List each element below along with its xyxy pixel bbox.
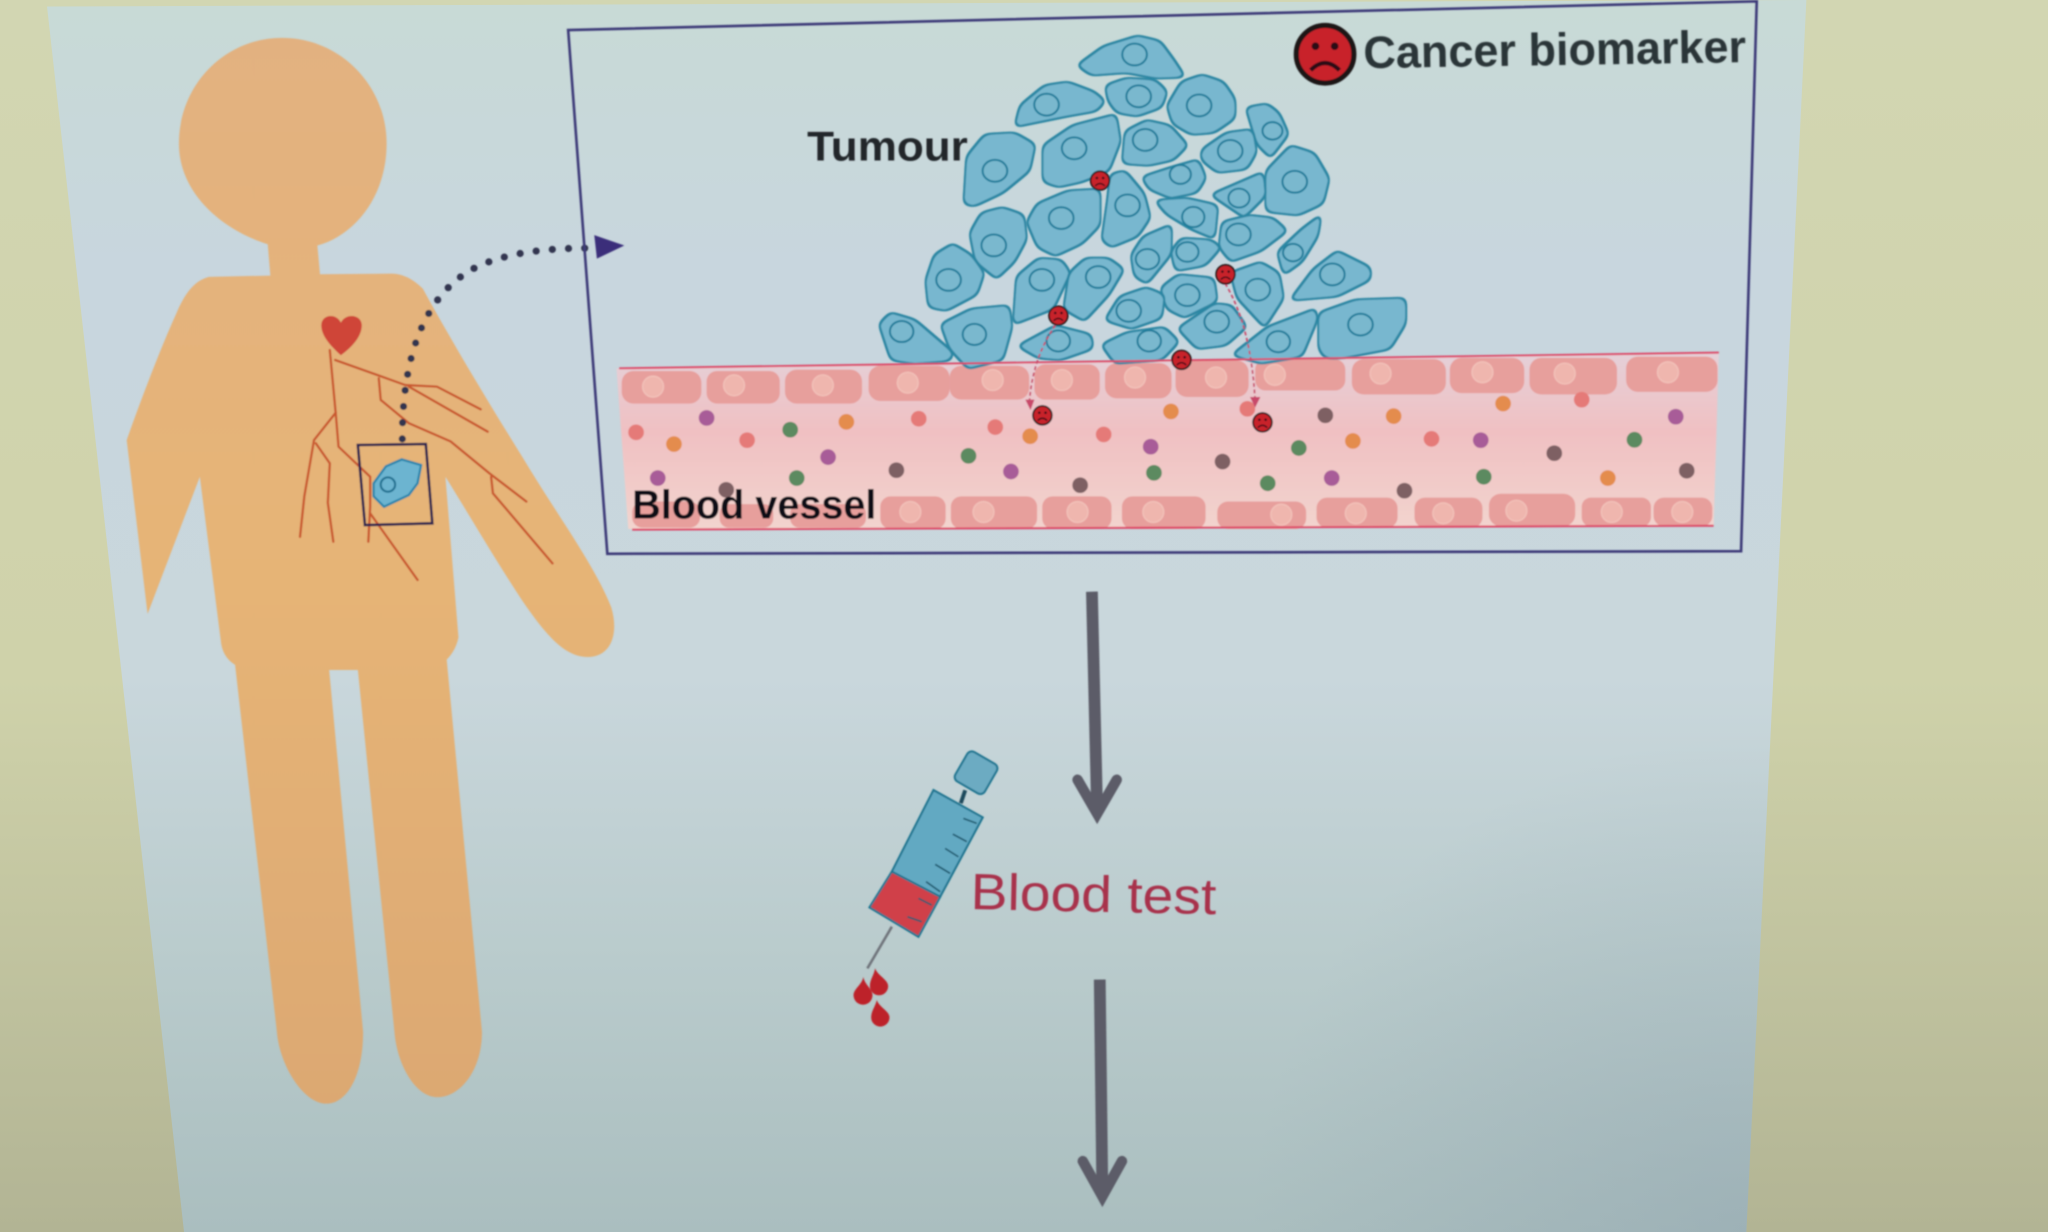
biomarker release arrows <box>1025 283 1260 410</box>
biomarker markers <box>1033 171 1272 432</box>
arrow: blood test downward <box>1083 980 1122 1196</box>
label: blood test: Blood test <box>970 863 1217 925</box>
human figure with vessels <box>127 38 614 1104</box>
dotted arrow to zoomed view <box>402 235 624 439</box>
tumour cell cluster <box>878 35 1407 370</box>
blood cells in plasma <box>628 392 1695 499</box>
body silhouette <box>127 38 614 1104</box>
location box with tumour cell <box>358 444 432 525</box>
icon: syringe <box>854 750 999 1027</box>
icon: heart <box>321 316 362 355</box>
legend: cancer biomarker: Cancer biomarker <box>1363 21 1747 78</box>
panel: tumour and blood vessel <box>568 1 1757 554</box>
vessel boundary lines <box>619 353 1719 530</box>
label: tumour: Tumour <box>807 123 968 170</box>
label: blood vessel: Blood vessel <box>632 482 876 528</box>
blood vessel <box>616 353 1719 529</box>
arrow: panel to blood test <box>1078 592 1117 814</box>
vessel wall cells: upper row <box>622 357 1718 404</box>
vessel wall cells: lower row <box>632 494 1712 529</box>
arteries <box>300 350 552 580</box>
